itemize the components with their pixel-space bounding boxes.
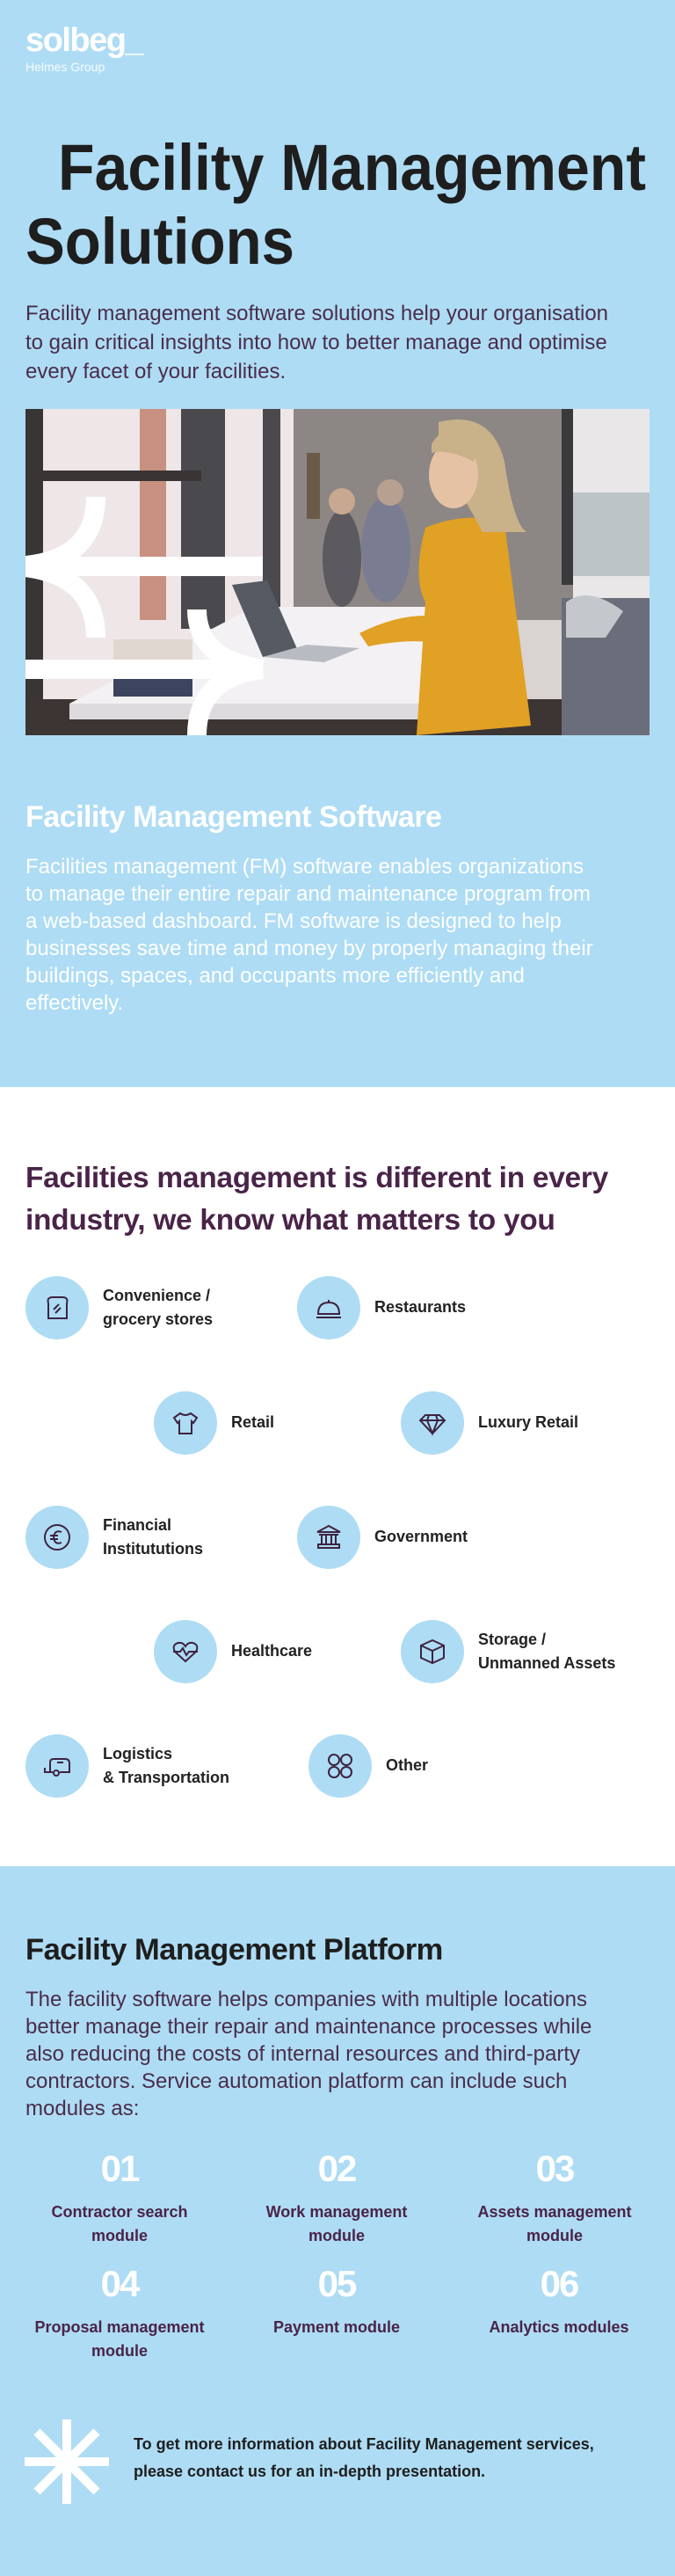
item: government — [297, 1506, 468, 1569]
platform paragraph: also reducing the costs of internal resources and third-party — [25, 2042, 580, 2066]
sofa — [562, 598, 650, 735]
module 01: Contractor search — [51, 2203, 188, 2221]
boxes — [113, 639, 192, 666]
item: logistics — [25, 1734, 229, 1798]
icon: box — [401, 1620, 464, 1683]
item: retail: Retail — [231, 1413, 274, 1431]
item: restaurants — [297, 1276, 466, 1339]
module 06: Analytics modules — [489, 2318, 629, 2336]
logo: Helmes Group — [25, 60, 105, 74]
icon: four circles — [308, 1734, 372, 1798]
icon: cloche — [297, 1276, 360, 1339]
icon: bread — [25, 1276, 89, 1339]
item: storage: Storage / — [478, 1631, 546, 1648]
module 01 — [51, 2148, 188, 2244]
contact callout — [134, 2435, 594, 2480]
software paragraph: a web-based dashboard. FM software is designed to help — [25, 909, 562, 933]
module 02: Work management — [266, 2203, 407, 2221]
icon: diamond — [401, 1391, 464, 1455]
intro paragraph: every facet of your facilities. — [25, 360, 286, 383]
icon: building — [297, 1506, 360, 1569]
platform paragraph: modules as: — [25, 2097, 139, 2120]
platform heading: Facility Management Platform — [25, 1933, 443, 1967]
icon: heart — [154, 1620, 217, 1683]
platform paragraph — [25, 1988, 592, 2120]
software paragraph: to manage their entire repair and maintenance program from — [25, 882, 591, 906]
intro paragraph: to gain critical insights into how to better manage and optimise — [25, 331, 607, 354]
module 04: Proposal management — [34, 2318, 205, 2336]
item: financial: Institututions — [103, 1540, 203, 1558]
item: storage — [401, 1620, 615, 1683]
section: industries — [0, 1087, 675, 1866]
item: convenience — [25, 1276, 213, 1339]
modules grid — [34, 2148, 632, 2360]
module 05: Payment module — [273, 2318, 400, 2336]
title — [25, 132, 646, 273]
module 04 — [34, 2263, 205, 2360]
module 02 — [265, 2148, 408, 2244]
woman — [417, 518, 531, 735]
module 05 — [273, 2263, 400, 2336]
item: luxury retail: Luxury Retail — [478, 1413, 578, 1431]
item: other: Other — [386, 1756, 428, 1774]
icon: asterisk — [25, 2419, 109, 2504]
software paragraph: Facilities management (FM) software enables organizations — [25, 855, 584, 879]
platform paragraph: contractors. Service automation platform can include such — [25, 2069, 567, 2093]
item: financial — [25, 1506, 203, 1569]
industries heading: Facilities management is different in every — [25, 1162, 608, 1194]
item: government: Government — [374, 1528, 468, 1545]
contact callout: please contact us for an in-depth presentation. — [134, 2463, 485, 2480]
software paragraph — [25, 855, 593, 1015]
software paragraph: businesses save time and money by properly managing their — [25, 937, 593, 960]
heading: Facility Management Software: Facility Management Software — [25, 800, 441, 834]
industries heading — [25, 1162, 608, 1237]
item: logistics: Logistics — [103, 1745, 172, 1762]
item: healthcare — [154, 1620, 312, 1683]
laptop — [232, 580, 298, 657]
industries heading: industry, we know what matters to you — [25, 1204, 555, 1237]
decorative white arrow shapes — [25, 497, 263, 735]
module 03 — [477, 2148, 632, 2244]
module 05: 05 — [318, 2263, 355, 2304]
item: luxury retail — [401, 1391, 578, 1455]
module 06: 06 — [541, 2263, 577, 2304]
section: hero background — [0, 0, 675, 1087]
item: financial: Financial — [103, 1516, 171, 1534]
icon: trailer — [25, 1734, 89, 1798]
background people — [323, 510, 361, 607]
desk — [69, 607, 425, 717]
module 03: 03 — [536, 2148, 573, 2189]
contact callout: To get more information about Facility Management services, — [134, 2435, 594, 2453]
intro paragraph: Facility management software solutions help your organisation — [25, 302, 608, 325]
module 04: module — [91, 2342, 148, 2360]
logo: solbeg_ — [25, 22, 142, 59]
software paragraph: effectively. — [25, 991, 123, 1015]
icon: euro — [25, 1506, 89, 1569]
platform paragraph: The facility software helps companies with multiple locations — [25, 1988, 587, 2011]
module 02: 02 — [318, 2148, 355, 2189]
item: convenience: Convenience / — [103, 1287, 210, 1304]
module 01: 01 — [101, 2148, 138, 2189]
module 03: Assets management — [477, 2203, 632, 2221]
module 06 — [489, 2263, 629, 2336]
section: platform — [0, 1866, 675, 2576]
icon: shirt — [154, 1391, 217, 1455]
software paragraph: buildings, spaces, and occupants more efficiently and — [25, 964, 525, 988]
item: restaurants: Restaurants — [374, 1298, 466, 1316]
module 01: module — [91, 2227, 148, 2244]
item: logistics: & Transportation — [103, 1769, 229, 1786]
photo — [25, 409, 650, 735]
platform paragraph: better manage their repair and maintenance processes while — [25, 2015, 592, 2039]
module 04: 04 — [101, 2263, 138, 2304]
module 03: module — [526, 2227, 583, 2244]
module 02: module — [308, 2227, 365, 2244]
item: storage: Unmanned Assets — [478, 1654, 615, 1672]
item: convenience: grocery stores — [103, 1310, 213, 1328]
intro paragraph — [25, 302, 608, 383]
item: other — [308, 1734, 428, 1798]
item: retail — [154, 1391, 274, 1455]
item: healthcare: Healthcare — [231, 1642, 312, 1660]
